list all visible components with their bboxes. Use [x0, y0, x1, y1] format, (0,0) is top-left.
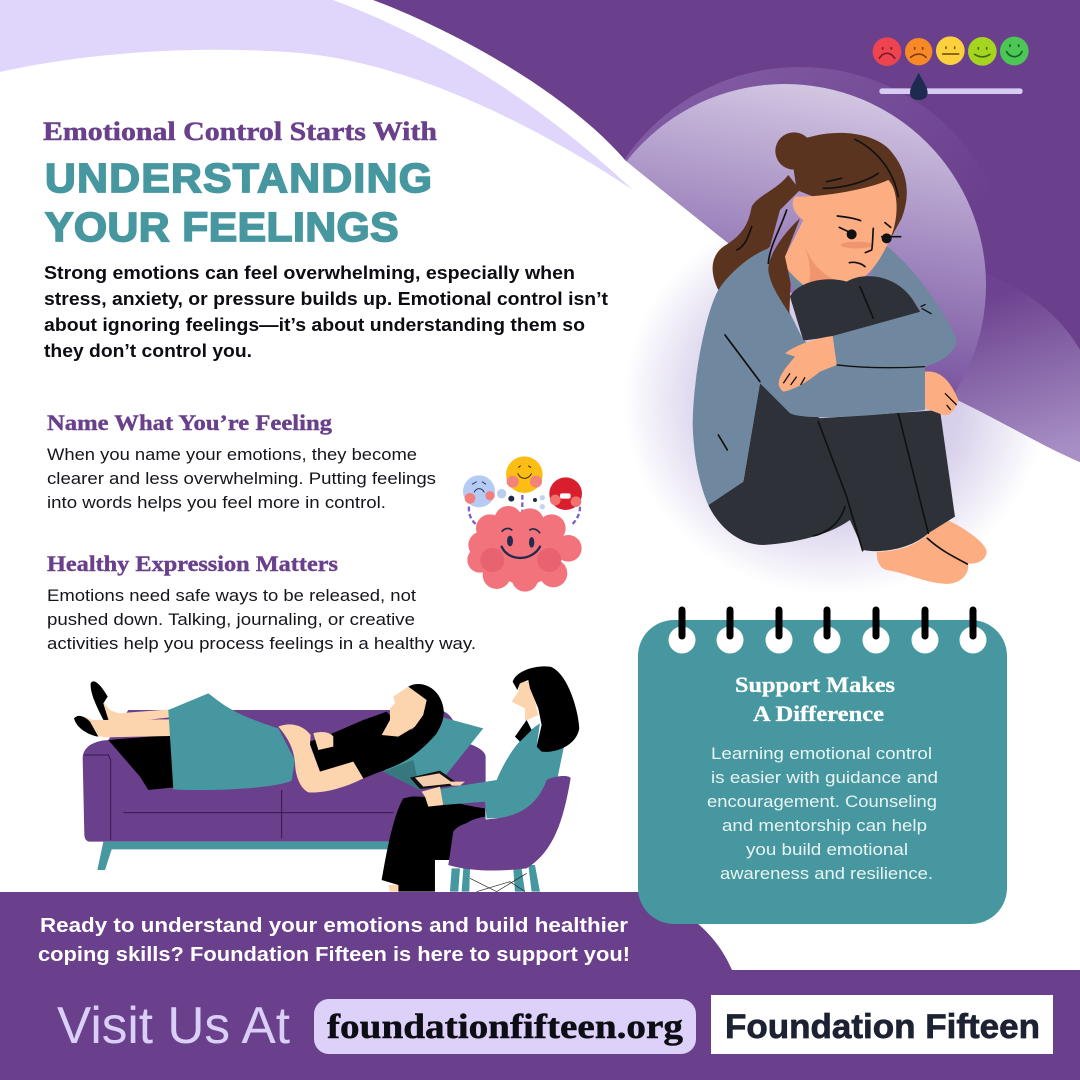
text: name what you're feeling: clearer and less overwhelming. Putting feelings	[47, 470, 436, 488]
card text: you build emotional	[746, 840, 908, 859]
illustration: therapy session	[74, 666, 579, 892]
title line 2: UNDERSTANDING	[45, 155, 432, 201]
text: healthy expression matters: pushed down. Talking, journaling, or creative	[47, 611, 415, 629]
card heading: Support Makes	[735, 672, 895, 697]
text: name what you're feeling: into words helps you feel more in control.	[47, 494, 386, 512]
text: healthy expression matters: Emotions need safe ways to be released, not	[47, 587, 416, 605]
pants	[708, 383, 955, 551]
call to action	[38, 915, 630, 966]
sofa	[83, 710, 486, 870]
left hand	[779, 336, 837, 392]
title	[43, 117, 438, 250]
background: purple wave	[373, 0, 1080, 462]
front hair strand	[768, 218, 800, 314]
angry face	[549, 477, 582, 510]
background: glow behind figure	[624, 67, 1080, 582]
logo box: Foundation Fifteen	[725, 1008, 1040, 1046]
heading: name what you're feeling: Name What You’re Feeling	[47, 410, 332, 435]
card: support makes a difference	[638, 610, 1007, 924]
forearm upper	[833, 312, 957, 367]
right hand	[925, 371, 958, 415]
card text: awareness and resilience.	[720, 864, 933, 883]
sad face	[463, 475, 495, 507]
card heading: A Difference	[753, 701, 884, 726]
slider track	[879, 88, 1023, 94]
face	[785, 180, 897, 285]
card text: Learning emotional control	[711, 744, 932, 763]
text: healthy expression matters	[47, 587, 476, 653]
mood faces	[873, 36, 1029, 66]
mood meter	[873, 36, 1029, 100]
website pill: foundationfifteen.org	[327, 1007, 684, 1046]
intro paragraph: Strong emotions can feel overwhelming, especially when	[44, 263, 575, 283]
card text	[707, 744, 938, 883]
bottom purple ribbon	[0, 892, 1080, 1080]
call to action: coping skills? Foundation Fifteen is here to support you!	[38, 944, 630, 966]
text: name what you're feeling	[47, 446, 436, 512]
card text: and mentorship can help	[722, 816, 927, 835]
connectors	[469, 495, 580, 526]
card body	[638, 620, 1007, 924]
intro paragraph	[44, 263, 608, 361]
shoulder	[870, 245, 957, 338]
knees	[790, 276, 921, 341]
heading: healthy expression matters: Healthy Expression Matters	[47, 551, 338, 576]
title line 3: YOUR FEELINGS	[45, 204, 399, 250]
foot	[877, 520, 987, 584]
card text: is easier with guidance and	[711, 768, 938, 787]
logo box	[711, 995, 1053, 1054]
spiral rings	[668, 626, 986, 654]
figure: sad woman hugging knees	[693, 132, 987, 584]
forearm lower	[760, 313, 925, 417]
card text: encouragement. Counseling	[707, 792, 937, 811]
card heading	[735, 672, 895, 726]
slider knob	[910, 73, 928, 100]
background: lavender wave	[0, 0, 633, 190]
visit us at: Visit Us At	[57, 997, 291, 1055]
sweater body	[693, 248, 800, 505]
happy face	[506, 456, 543, 493]
text: name what you're feeling: When you name your emotions, they become	[47, 446, 417, 464]
intro paragraph: stress, anxiety, or pressure builds up. Emotional control isn’t	[44, 289, 608, 309]
icon: brain with emotions	[463, 456, 582, 592]
pillow	[383, 717, 483, 790]
text: healthy expression matters: activities help you process feelings in a healthy way.	[47, 635, 476, 653]
counselor	[382, 666, 579, 892]
website pill	[314, 999, 696, 1054]
call to action: Ready to understand your emotions and build healthier	[40, 915, 628, 937]
arm lines	[725, 304, 957, 410]
facial features	[718, 139, 967, 564]
patient	[74, 681, 444, 792]
hair	[713, 132, 907, 290]
title line 1: Emotional Control Starts With	[43, 117, 438, 146]
brain	[467, 506, 582, 592]
intro paragraph: they don’t control you.	[44, 341, 252, 361]
intro paragraph: about ignoring feelings—it’s about understanding them so	[44, 315, 585, 335]
